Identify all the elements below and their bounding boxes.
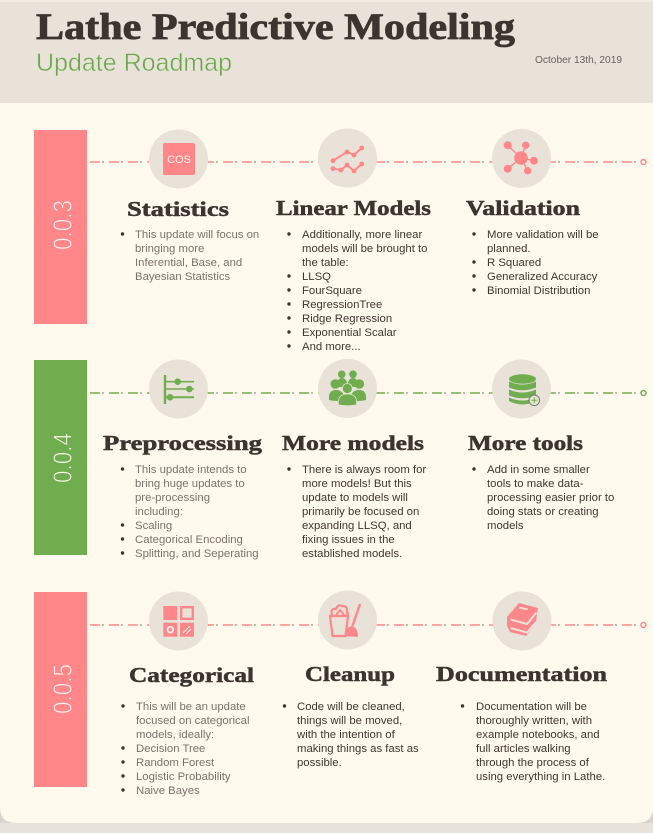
text: more tools list: Add in some smaller [487, 464, 590, 476]
panel: version 0.0.3 [34, 128, 646, 353]
version tab 0.0.5: 0.0.5 [48, 664, 78, 714]
text: documentation list [461, 701, 605, 783]
text: validation list: Generalized Accuracy [487, 271, 598, 283]
text: preprocessing list: This update intends to [135, 464, 247, 476]
text: more models list: update to models will [302, 492, 408, 504]
text: categorical list: Random Forest [136, 757, 215, 769]
subtitle: Update Roadmap [36, 49, 232, 77]
heading: More tools: More tools [468, 431, 583, 455]
panel: version 0.0.5 [34, 590, 646, 797]
icon: abacus [149, 360, 208, 418]
text: linear models list: Additionally, more linear [302, 229, 422, 241]
text: linear models list: Exponential Scalar [302, 327, 397, 339]
text: documentation list: Documentation will be [476, 701, 587, 713]
text: categorical list: Logistic Probability [136, 771, 231, 783]
text: more tools list: tools to make data- [487, 478, 584, 490]
version tab 0.0.3: 0.0.3 [48, 200, 78, 250]
text: statistics list [121, 229, 259, 283]
text: linear models list: models will be brought to [302, 243, 427, 255]
text: statistics list: bringing more [135, 243, 204, 255]
date: October 13th, 2019 [535, 54, 622, 66]
icon: database plus [492, 360, 551, 418]
text: documentation list: using everything in Lathe. [476, 771, 605, 783]
text: validation list: planned. [487, 243, 531, 255]
text: statistics list: This update will focus on [135, 229, 259, 241]
text: preprocessing list: including: [135, 506, 183, 518]
panel: version 0.0.4 [34, 359, 646, 560]
text: cleanup list: making things as fast as [297, 743, 419, 755]
icon: network [492, 129, 551, 188]
timeline 0.0.5 [90, 622, 646, 628]
text: documentation list: example notebooks, and [476, 729, 600, 741]
text: more models list: established models. [302, 548, 402, 560]
text: more tools list: models [487, 520, 524, 532]
text: preprocessing list: bring huge updates to [135, 478, 245, 490]
text: more models list: primarily be focused on [302, 506, 419, 518]
title: Lathe Predictive Modeling [36, 6, 515, 47]
version tab 0.0.3 [34, 130, 87, 324]
text: preprocessing list: Categorical Encoding [135, 534, 243, 546]
text: validation list [472, 229, 599, 297]
icon: line chart [318, 128, 377, 188]
text: linear models list: the table: [302, 257, 349, 269]
text: categorical list: Decision Tree [136, 743, 205, 755]
icon: group of people [318, 359, 377, 418]
text: linear models list: LLSQ [302, 271, 331, 283]
text: statistics list: Bayesian Statistics [135, 271, 231, 283]
version tab 0.0.4 [34, 360, 87, 555]
text: linear models list: RegressionTree [302, 299, 382, 311]
text: more models list: There is always room for [302, 464, 426, 476]
header [0, 2, 653, 103]
text: categorical list: This will be an update [136, 701, 246, 713]
text: more tools list [472, 464, 614, 532]
text: documentation list: full articles walking [476, 743, 571, 755]
heading: Categorical: Categorical [129, 663, 254, 687]
icon: cos function: COS [167, 154, 191, 166]
text: more tools list: doing stats or creating [487, 506, 599, 518]
heading: More models: More models [282, 431, 424, 455]
text: documentation list: through the process of [476, 757, 590, 769]
text: linear models list: FourSquare [302, 285, 362, 297]
text: documentation list: thoroughly written, with [476, 715, 592, 727]
heading: Cleanup: Cleanup [305, 662, 395, 686]
text: linear models list: Ridge Regression [302, 313, 392, 325]
text: categorical list: models, ideally: [136, 729, 214, 741]
text: validation list: R Squared [487, 257, 541, 269]
text: validation list: More validation will be [487, 229, 599, 241]
heading: Validation: Validation [466, 196, 580, 220]
timeline 0.0.3 [90, 160, 646, 164]
version tab 0.0.4: 0.0.4 [48, 433, 78, 483]
text: categorical list: focused on categorical [136, 715, 250, 727]
icon: bucket and broom [318, 590, 377, 650]
text: preprocessing list [121, 464, 259, 560]
heading: Statistics: Statistics [127, 197, 229, 221]
text: cleanup list: things will be moved, [297, 715, 402, 727]
text: cleanup list: possible. [297, 757, 342, 769]
text: preprocessing list: Scaling [135, 520, 172, 532]
text: cleanup list: with the intention of [296, 729, 396, 741]
version tab 0.0.5 [34, 592, 87, 787]
text: categorical list: Naive Bayes [136, 785, 200, 797]
text: statistics list: Inferential, Base, and [135, 257, 242, 269]
text: cleanup list [283, 701, 419, 769]
text: linear models list [287, 229, 427, 353]
text: more tools list: processing easier prior to [487, 492, 614, 504]
heading: Documentation: Documentation [436, 662, 607, 686]
icon: cos function [149, 130, 208, 188]
heading: Linear Models: Linear Models [276, 196, 431, 220]
text: more models list: expanding LLSQ, and [302, 520, 412, 532]
text: more models list: more models! But this [302, 478, 412, 490]
text: preprocessing list: Splitting, and Seperating [135, 548, 259, 560]
text: linear models list: And more... [302, 341, 361, 353]
icon: stack of books [492, 592, 552, 650]
icon: category grid [149, 592, 208, 650]
text: more models list [287, 464, 426, 560]
heading: Preprocessing: Preprocessing [103, 431, 262, 455]
text: preprocessing list: pre-processing [135, 492, 210, 504]
text: categorical list [121, 701, 250, 797]
timeline 0.0.4 [90, 390, 646, 396]
text: validation list: Binomial Distribution [487, 285, 590, 297]
text: more models list: fixing issues in the [302, 534, 395, 546]
text: cleanup list: Code will be cleaned, [297, 701, 405, 713]
